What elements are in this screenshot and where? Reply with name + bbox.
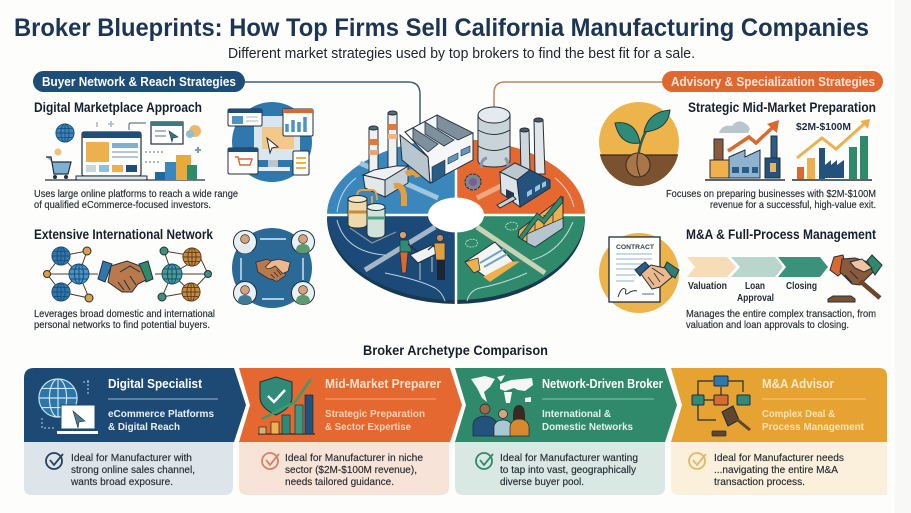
panel: M&A Advisor card: M&A Advisor (762, 377, 834, 391)
connector: buyer network to disc (245, 82, 420, 131)
factory: top right (465, 107, 550, 208)
panel: M&A Advisor card (671, 368, 887, 495)
process labels: Approval (737, 292, 774, 304)
panel: Network-Driven Broker card: diverse buyer pool. (500, 476, 584, 488)
factory: top left (363, 111, 473, 206)
text block: Uses large online platforms to reach a wide range (34, 188, 238, 200)
heading: M&A & Full-Process Management (686, 227, 876, 242)
panel: Digital Specialist card: strong online sales channel, (71, 464, 195, 476)
panel: Mid-Market Preparer card (239, 368, 462, 495)
panel: Digital Specialist card: & Digital Reach (108, 421, 180, 433)
heading: Digital Marketplace Approach (34, 100, 202, 115)
process chevrons (687, 257, 828, 277)
icon: check (689, 453, 706, 469)
panel: Extensive International Network (34, 227, 215, 331)
panel: Network-Driven Broker card (455, 368, 677, 495)
panel: Mid-Market Preparer card: Mid-Market Preparer (325, 377, 441, 391)
text block: of qualified eCommerce-focused investors. (34, 199, 211, 211)
title: Broker Blueprints: How Top Firms Sell California Manufacturing Companies (14, 14, 869, 42)
text block: Leverages broad domestic and international (34, 308, 215, 320)
icon: check (476, 453, 493, 469)
panel: Network-Driven Broker card: to tap into vast, geographically (500, 464, 637, 476)
icon: world map and people (471, 375, 533, 436)
pill: Advisory & Specialization Strategies: Advisory & Specialization Strategies (671, 74, 875, 89)
icon: handshake and gavel (828, 255, 882, 302)
disc edge (327, 218, 585, 304)
chart: central segmented manufacturing disc (325, 107, 587, 304)
panel: Digital Specialist card (24, 368, 246, 495)
text block: Manages the entire complex transaction, from (686, 308, 876, 320)
panel: Digital Specialist card: wants broad exposure. (70, 476, 173, 488)
text block: Focuses on preparing businesses with $2M-$100M (666, 188, 876, 200)
panel: M&A & Full-Process Management (686, 227, 882, 331)
icon: circular people network (232, 228, 314, 308)
icon: revenue bar chart (792, 119, 872, 180)
panel: Digital Specialist card: eCommerce Platforms (108, 408, 214, 420)
icon: revenue bar chart: $2M-$100M (796, 121, 851, 133)
panel: M&A Advisor card: ...navigating the entire M&A (714, 464, 838, 476)
segment: bottom right (456, 215, 585, 300)
tanks: bottom left (348, 190, 396, 243)
icon: contract and handshake (599, 233, 679, 313)
process labels: Loan (745, 280, 765, 292)
connector: advisory to disc (494, 82, 662, 108)
icon: circular marketplace screens (228, 102, 313, 182)
heading: Extensive International Network (34, 227, 213, 242)
icon: check (46, 453, 63, 469)
panel: M&A Advisor card: Ideal for Manufacturer needs (714, 452, 844, 464)
blueprint document model (465, 242, 515, 280)
panel: Digital Marketplace Approach (34, 100, 238, 211)
segment: top left (327, 139, 456, 215)
people at planning table (400, 232, 445, 280)
panel: Network-Driven Broker card: Ideal for Manufacturer wanting (500, 452, 638, 464)
icon: online marketplace scene (45, 121, 205, 180)
icon: connected globes and handshake (44, 247, 212, 302)
panel: Network-Driven Broker card: International & (542, 408, 611, 420)
icon: flowchart and gavel (692, 376, 750, 436)
text block: personal networks to find potential buyers. (34, 319, 210, 331)
panel: Network-Driven Broker card: Domestic Networks (542, 421, 633, 433)
panel: Mid-Market Preparer card: sector ($2M-$100M revenue), (285, 464, 417, 476)
pill: Buyer Network & Reach Strategies: Buyer Network & Reach Strategies (42, 74, 236, 89)
panel: Mid-Market Preparer card: Ideal for Manufacturer in niche (285, 452, 423, 464)
panel: Mid-Market Preparer card: & Sector Expertise (325, 421, 411, 433)
icon: globe and laptop (39, 379, 98, 434)
segment: bottom left (327, 215, 456, 300)
heading: Strategic Mid-Market Preparation (688, 100, 876, 115)
subtitle: Different market strategies used by top brokers to find the best fit for a sale. (228, 45, 695, 62)
pill: Advisory & Specialization Strategies (662, 71, 883, 92)
heading: Broker Archetype Comparison: Broker Archetype Comparison (363, 343, 548, 358)
rising chart model (518, 196, 563, 247)
panel: Mid-Market Preparer card: Strategic Preparation (325, 408, 425, 420)
panel: M&A Advisor card: transaction process. (714, 476, 805, 488)
panel: Digital Specialist card: Ideal for Manufacturer with (71, 452, 192, 464)
segment: top right (456, 139, 585, 215)
icon: factory with rising arrow (705, 120, 785, 180)
pill: Buyer Network & Reach Strategies (33, 71, 245, 92)
text block: valuation and loan approvals to closing. (686, 319, 849, 331)
panel: M&A Advisor card: Process Management (762, 421, 864, 433)
process labels: Closing (786, 280, 817, 292)
panel: Mid-Market Preparer card: needs tailored guidance. (285, 476, 394, 488)
icon: seedling (599, 102, 679, 186)
panel: Digital Specialist card: Digital Specialist (108, 377, 203, 391)
panel: Strategic Mid-Market Preparation (666, 100, 876, 211)
panel: M&A Advisor card: Complex Deal & (762, 408, 835, 420)
icon: check (262, 453, 279, 469)
icon: shield and bars (258, 377, 315, 434)
centre hole (428, 198, 484, 232)
icon: contract and handshake: CONTRACT (616, 244, 655, 251)
process labels: Valuation (688, 280, 727, 292)
panel: Network-Driven Broker card: Network-Driven Broker (542, 377, 663, 391)
process labels (688, 280, 817, 304)
text block: revenue for a successful, high-value exit. (710, 199, 876, 211)
